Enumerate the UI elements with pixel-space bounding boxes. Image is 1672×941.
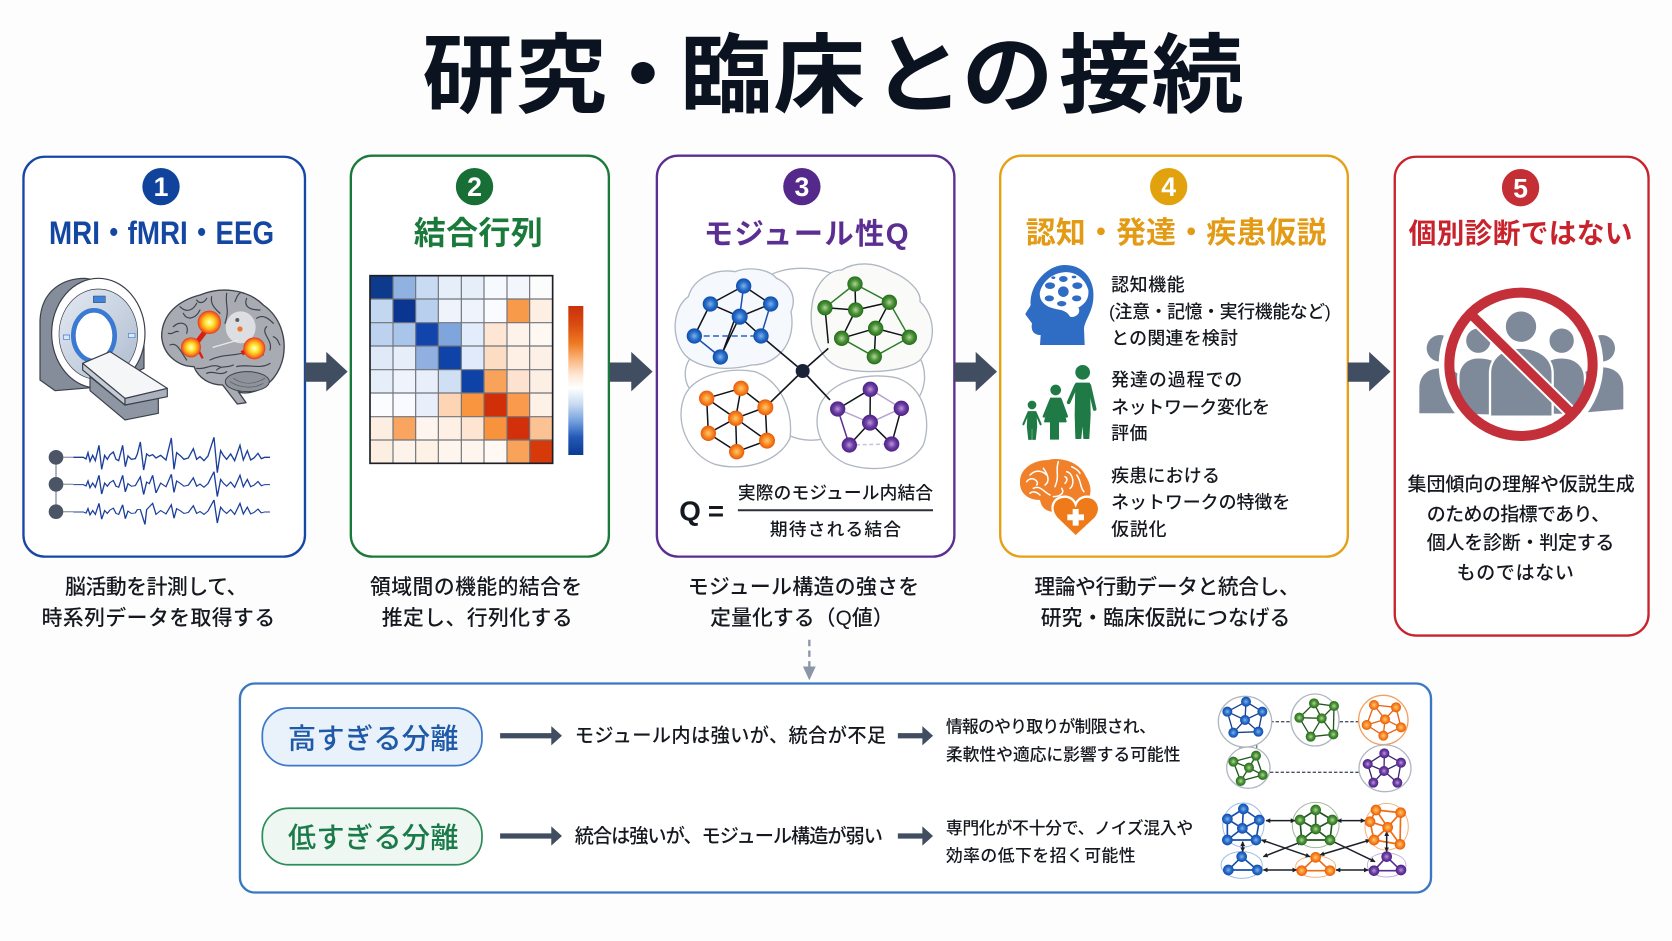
arrow [500, 726, 562, 745]
text: high consequence: 情報のやり取りが制限され、 [946, 717, 1156, 737]
arrow 2 to 3 [610, 352, 653, 391]
panel 5: not individual diagnosis [1395, 157, 1649, 636]
text: explanation [1408, 474, 1635, 584]
text: low consequence [946, 818, 1193, 866]
text: explanation: 集団傾向の理解や仮説生成 [1408, 474, 1635, 496]
number badge 4 [1150, 168, 1187, 205]
number badge 2 [456, 168, 493, 205]
icon: brain with heart [1020, 459, 1099, 537]
formula: Q: 期待される結合 [770, 519, 901, 539]
panel 3: modularity Q [657, 156, 954, 557]
pill: too much segregation [262, 708, 482, 766]
text: disease [1111, 466, 1290, 539]
icon: family figures [1023, 365, 1095, 439]
number badge 5: 5 [1513, 173, 1528, 203]
caption 2: 推定し、行列化する [382, 607, 573, 630]
heading 2: 結合行列 [414, 215, 543, 251]
pill: too little segregation: 低すぎる分離 [288, 822, 459, 854]
text: low result: 統合は強いが、モジュール構造が弱い [575, 825, 883, 847]
text: disease: ネットワークの特徴を [1111, 493, 1290, 513]
diagram: separated modules [1218, 694, 1411, 792]
text: cognition: 認知機能 [1111, 275, 1185, 295]
text: disease: 仮説化 [1111, 519, 1167, 539]
caption 1: 脳活動を計測して、 [65, 576, 247, 599]
text: high consequence [946, 717, 1181, 764]
number badge 4: 4 [1161, 172, 1176, 202]
text: explanation: のための指標であり、 [1427, 503, 1610, 525]
diagram: over-connected modules [1221, 802, 1408, 878]
number badge 2: 2 [467, 172, 482, 202]
icon: MRI scanner [40, 278, 167, 420]
arrow 3 to 4 [954, 352, 997, 391]
chart: heatmap matrix [370, 276, 583, 463]
caption 2: 領域間の機能的結合を [370, 576, 582, 599]
caption 2 [370, 576, 582, 630]
arrow [898, 726, 933, 745]
text: cognition: (注意・記憶・実行機能など) [1109, 302, 1331, 322]
caption 4: 研究・臨床仮説につなげる [1041, 607, 1290, 630]
text: low consequence: 効率の低下を招く可能性 [946, 847, 1136, 866]
formula: Q: Q = [679, 495, 724, 526]
number badge 1 [142, 168, 180, 205]
number badge 3 [783, 168, 821, 205]
number badge 5 [1502, 169, 1539, 206]
arrow [898, 826, 933, 846]
text: cognition [1109, 275, 1331, 348]
chart: EEG waveforms [49, 437, 270, 524]
caption 1: 時系列データを取得する [42, 606, 275, 630]
caption 3 [688, 576, 919, 630]
panel: Q extremes [240, 684, 1431, 893]
arrow [500, 826, 562, 846]
formula: Q [679, 483, 933, 539]
heading 1: MRI・fMRI・EEG [49, 215, 274, 251]
panel 1: MRI fMRI EEG [23, 157, 305, 557]
text: high consequence: 柔軟性や適応に影響する可能性 [946, 745, 1181, 764]
diagram: four-module network [675, 264, 932, 469]
arrow 1 to 2 [305, 352, 348, 391]
text: low consequence: 専門化が不十分で、ノイズ混入や [946, 818, 1193, 838]
panel 4: cognition development disease [1000, 156, 1348, 557]
title: 研究・臨床との接続 [422, 27, 1243, 124]
formula: Q: 実際のモジュール内結合 [738, 483, 933, 503]
text: explanation: 個人を診断・判定する [1427, 532, 1614, 554]
caption 1 [42, 576, 275, 630]
caption 3: モジュール構造の強さを [688, 576, 919, 599]
text: cognition: との関連を検討 [1111, 328, 1238, 348]
text: disease: 疾患における [1111, 466, 1220, 486]
heading 3: モジュール性Q [704, 218, 909, 251]
caption 4 [1034, 575, 1300, 630]
text: development: 評価 [1111, 423, 1147, 443]
heading 4: 認知・発達・疾患仮説 [1026, 217, 1327, 250]
text: development [1111, 370, 1270, 443]
arrow 4 to 5 [1348, 352, 1390, 391]
icon: prohibited group of people [1419, 286, 1623, 443]
panel 2: connectivity matrix [351, 156, 609, 557]
pill: too much segregation: 高すぎる分離 [288, 723, 459, 755]
pill: too little segregation [262, 808, 482, 865]
icon: brain with activation [162, 290, 284, 404]
number badge 3: 3 [794, 172, 809, 202]
number badge 1: 1 [154, 172, 169, 202]
caption 4: 理論や行動データと統合し、 [1034, 575, 1300, 599]
dashed arrow down [803, 640, 816, 680]
text: explanation: ものではない [1457, 562, 1574, 584]
heading 5: 個別診断ではない [1409, 218, 1633, 249]
text: development: 発達の過程での [1111, 370, 1242, 390]
icon: head with brain network [1025, 265, 1094, 345]
text: development: ネットワーク変化を [1111, 398, 1270, 418]
caption 3: 定量化する（Q値） [710, 607, 894, 630]
text: high result: モジュール内は強いが、統合が不足 [575, 725, 886, 747]
